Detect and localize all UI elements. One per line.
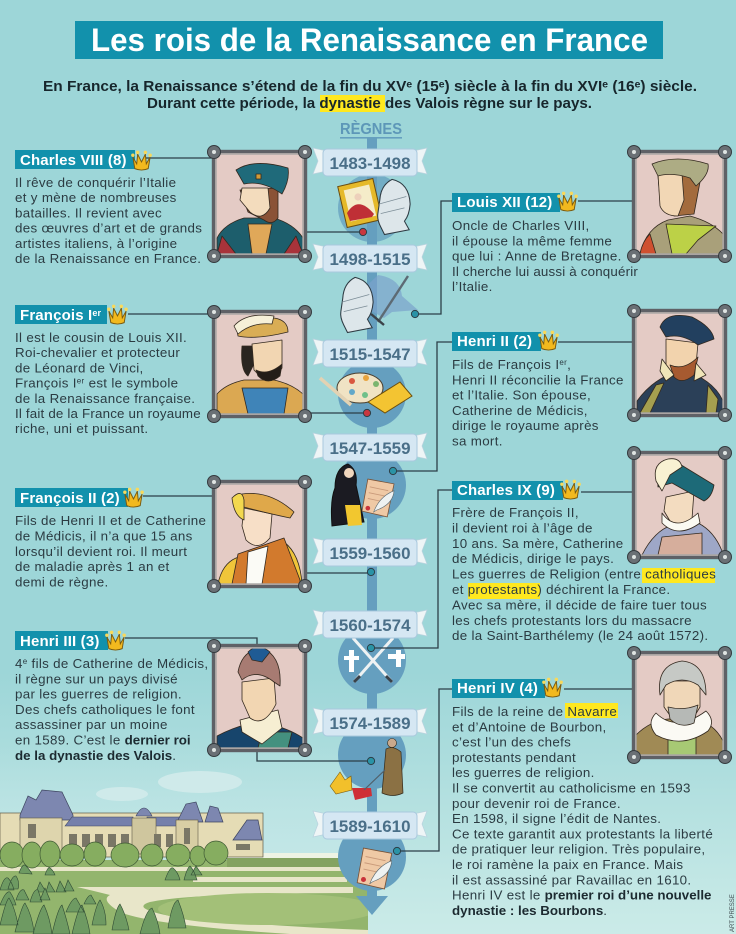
text: François Ier: riche, uni et puissant. <box>15 421 148 436</box>
icon: palette and gold bar <box>320 373 412 413</box>
icon: Catherine de Médicis with decree <box>331 464 394 526</box>
text: François II: lorsqu’il devient roi. Il meurt <box>15 544 187 559</box>
text: Henri IV: En 1598, il signe l’édit de Nantes. <box>452 811 661 826</box>
panel: Louis XII <box>452 146 732 294</box>
text: François Ier: François I <box>15 376 178 391</box>
text: Louis XII: il épouse la même femme <box>452 233 612 248</box>
text: François II: de maladie après 1 an et <box>15 559 170 574</box>
ribbon 1498-1515 <box>313 244 427 272</box>
text: Charles VIII: artistes italiens, à l’origine <box>15 236 177 251</box>
text: François II: Fils de Henri II et de Catherine <box>15 513 206 528</box>
introduction text: En France, la Renaissance s’étend de la fin du XVᵉ (15ᵉ) siècle à la fin du XVIᵉ (16ᵉ) siècle. <box>43 79 697 95</box>
portrait: Henri II <box>628 304 732 422</box>
panel: Charles IX <box>452 446 732 643</box>
heading: Henri II <box>452 331 559 351</box>
text: Henri III: . <box>172 748 176 763</box>
text: Charles IX: les chefs protestants lors du massacre <box>452 613 692 628</box>
ribbon 1547-1559 <box>313 433 427 461</box>
text: François II: demi de règne. <box>15 575 108 590</box>
château <box>0 790 263 858</box>
text: Henri IV: de pratiquer leur religion. Très populaire, <box>452 842 705 857</box>
text: François Ier: est le symbole <box>85 376 178 391</box>
text: Charles IX: et protestants) déchirent la France. <box>452 582 670 597</box>
text: Charles VIII: des œuvres d’art et de grands <box>15 221 202 236</box>
introduction text <box>43 79 697 112</box>
date ribbons <box>313 148 427 839</box>
heading: Louis XII <box>452 192 578 212</box>
icon: monk with dagger and fallen crown <box>330 738 403 800</box>
highlights: Charles IX <box>468 568 715 599</box>
text: Henri III: il règne sur un pays divisé <box>15 671 178 686</box>
landscape: château and gardens <box>0 771 368 934</box>
heading: François Ier <box>15 305 128 324</box>
text: Henri II: er <box>559 358 567 367</box>
heading: Henri III: Henri III (3) <box>20 633 99 650</box>
heading: Charles IX: Charles IX (9) <box>457 482 555 499</box>
text: Henri IV: pour devenir roi de France. <box>452 796 621 811</box>
icon: painting and helmet <box>338 178 410 234</box>
heading: François Ier: François I <box>20 307 92 324</box>
topiary cones <box>0 865 202 934</box>
text: François Ier: er <box>77 377 85 386</box>
ribbon 1483-1498: 1483-1498 <box>330 154 410 173</box>
panel: François II <box>15 476 312 592</box>
ribbon 1589-1610 <box>313 811 427 839</box>
text: Louis XII: Il cherche lui aussi à conquérir <box>452 264 638 279</box>
text: Henri IV: Fils de la reine de Navarre <box>452 704 617 719</box>
heading: Henri III <box>15 631 126 650</box>
portrait: François II <box>208 476 312 592</box>
ribbon 1515-1547 <box>313 339 427 367</box>
text: Charles IX: Les guerres de Religion (entre catholiques <box>452 567 716 582</box>
text: Charles VIII: batailles. Il revient avec <box>15 205 162 220</box>
ribbon 1560-1574: 1560-1574 <box>330 616 411 635</box>
ribbon 1574-1589: 1574-1589 <box>330 714 410 733</box>
ribbon 1589-1610: 1589-1610 <box>330 817 410 836</box>
text: Henri II: Catherine de Médicis, <box>452 403 588 418</box>
text: Louis XII: l’Italie. <box>452 279 493 294</box>
portrait: François Ier <box>208 306 312 422</box>
heading: François II <box>15 488 144 507</box>
ribbon 1547-1559: 1547-1559 <box>330 439 410 458</box>
text: Charles VIII: de la Renaissance en France. <box>15 251 201 266</box>
text: Henri III: Des chefs catholiques le font <box>15 702 195 717</box>
text: Henri IV: et d’Antoine de Bourbon, <box>452 719 607 734</box>
text: Henri III: 4 <box>15 656 208 671</box>
heading: Charles IX <box>452 480 581 500</box>
text: Henri IV: Ce texte garantit aux protestants la liberté <box>452 826 713 841</box>
ribbon 1560-1574 <box>313 610 427 638</box>
text: Henri II: dirige le royaume après <box>452 418 599 433</box>
heading: Henri II: Henri II (2) <box>457 333 532 350</box>
portrait: Henri III <box>208 640 312 756</box>
heading: François II: François II (2) <box>20 490 120 507</box>
text: Henri IV: il est assassiné par Ravaillac en 1610. <box>452 872 691 887</box>
timeline spine with arrow <box>338 137 418 915</box>
text: Henri II: , <box>567 357 571 372</box>
text: Henri III: par les guerres de religion. <box>15 687 182 702</box>
icon: helmet and sword <box>341 276 408 332</box>
text: Henri III: en 1589. C’est le dernier roi <box>15 732 191 748</box>
portrait: Louis XII <box>628 146 732 262</box>
text: François Ier: de la Renaissance française. <box>15 391 195 406</box>
portrait: Charles IX <box>628 446 732 564</box>
text: François Ier: Roi-chevalier et protecteur <box>15 345 180 360</box>
heading: François Ier: er <box>92 308 102 318</box>
text: Henri II: et l’Italie. Son épouse, <box>452 388 591 403</box>
text: Henri IV: Il se convertit au catholicisme en 1593 <box>452 780 691 796</box>
text: Henri IV: le roi ramène la paix en France. Mais <box>452 857 683 872</box>
portrait: Charles VIII <box>208 146 312 262</box>
text: Henri IV: c’est l’un des chefs <box>452 735 571 750</box>
timeline heading: règnes: RÈGNES <box>340 119 402 138</box>
panel: Henri IV <box>452 646 732 918</box>
text: Charles IX: de Médicis, dirige le pays. <box>452 551 614 566</box>
text: Henri II: Fils de François I <box>452 357 571 372</box>
icon: crossed swords with crosses <box>344 638 405 682</box>
text: Henri III: de la dynastie des Valois <box>15 748 172 763</box>
text: Charles VIII: et y mène de nombreuses <box>15 190 177 205</box>
text: François Ier: Il est le cousin de Louis XII. <box>15 330 187 345</box>
heading: Charles VIII <box>15 150 152 170</box>
text: Henri IV: dynastie : les Bourbons <box>452 903 603 918</box>
text: Henri IV: protestants pendant <box>452 750 576 765</box>
text: Henri II: sa mort. <box>452 434 503 448</box>
introduction text: Durant cette période, la dynastie des Valois règne sur le pays. <box>147 96 592 112</box>
heading: Henri IV <box>452 678 563 698</box>
panel: Charles VIII <box>15 146 312 266</box>
ribbon 1559-1560: 1559-1560 <box>330 544 410 563</box>
panel: Henri III <box>15 631 312 763</box>
portrait: Henri IV <box>628 646 732 764</box>
heading: Charles VIII: Charles VIII (8) <box>20 152 127 169</box>
ribbon 1515-1547: 1515-1547 <box>330 345 410 364</box>
ribbon 1574-1589 <box>313 708 427 736</box>
text: Henri III: e <box>23 657 28 666</box>
ribbon 1559-1560 <box>313 538 427 566</box>
connector lines and dots <box>125 158 632 855</box>
text: Charles IX: 10 ans. Sa mère, Catherine <box>452 536 624 551</box>
text: Charles IX: de la Saint-Barthélemy (le 24 août 1572). <box>452 628 708 643</box>
text: Charles IX: il devient roi à l’âge de <box>452 520 593 535</box>
tree hedge <box>0 841 228 868</box>
highlight: Navarre <box>565 703 618 718</box>
icon: edict of Nantes <box>357 848 392 889</box>
text: François Ier: Il fait de la France un royaume <box>15 406 201 421</box>
credit text: ART PRESSE <box>730 894 736 932</box>
heading: Henri IV: Henri IV (4) <box>457 680 538 697</box>
text: Louis XII: que lui : Anne de Bretagne. <box>452 249 622 264</box>
text: Charles IX: Frère de François II, <box>452 505 579 520</box>
heading: Louis XII: Louis XII (12) <box>457 194 552 211</box>
ribbon 1483-1498 <box>313 148 427 176</box>
text: Charles VIII: Il rêve de conquérir l’Italie <box>15 175 176 190</box>
text: Henri IV: Henri IV est le premier roi d’une nouvelle <box>452 888 711 903</box>
text: Louis XII: Oncle de Charles VIII, <box>452 218 590 233</box>
ribbon 1498-1515: 1498-1515 <box>330 250 410 269</box>
text: Henri IV: les guerres de religion. <box>452 765 595 780</box>
text: Henri III: assassiner par un moine <box>15 717 168 732</box>
text: François II: de Médicis, il n’a que 15 ans <box>15 528 193 543</box>
panel: François Ier <box>15 305 312 436</box>
text: François Ier: de Léonard de Vinci, <box>15 360 144 375</box>
text: Henri IV: . <box>603 903 607 918</box>
text: Henri II: Henri II réconcilie la France <box>452 372 624 387</box>
text: Henri III: fils de Catherine de Médicis, <box>28 656 208 671</box>
title banner: Les rois de la Renaissance en France <box>91 22 648 58</box>
panel: Henri II <box>452 304 732 448</box>
text: Charles IX: Avec sa mère, il décide de faire tuer tous <box>452 597 707 612</box>
